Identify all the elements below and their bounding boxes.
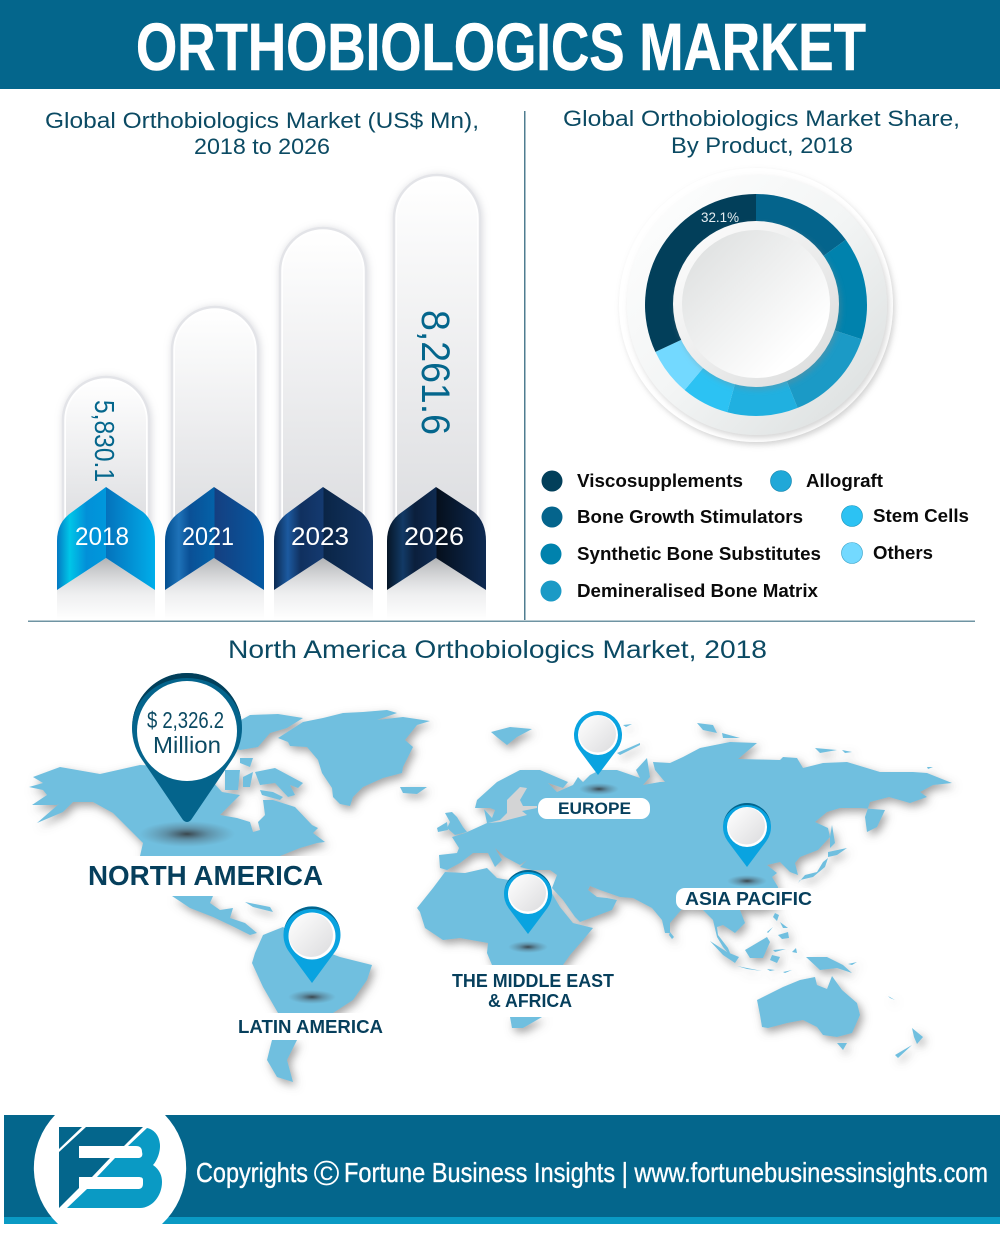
world map [29, 710, 952, 1082]
label: middle east and africa: & AFRICA [488, 991, 572, 1011]
legend: Viscosupplements [577, 471, 743, 491]
ribbon reflections [57, 558, 486, 620]
segment: demineralised bone matrix [756, 305, 862, 408]
bar 2018 [63, 377, 149, 530]
bar 2021 [172, 307, 258, 530]
label: middle east and africa: THE MIDDLE EAST [452, 971, 614, 991]
heading: north america: North America Orthobiologics Market, 2018 [228, 636, 767, 664]
segment: synthetic bone substitutes [756, 240, 867, 339]
ribbon 2023: 2023 [291, 523, 349, 551]
heading: market size: Global Orthobiologics Market (US$ Mn), [45, 108, 479, 133]
caribbean [245, 902, 273, 912]
value 2026: 8,261.6 [413, 310, 457, 435]
segment: viscosupplements [645, 194, 756, 352]
bar 2023 [280, 228, 366, 530]
share label: 32.1% [701, 209, 739, 225]
value 2018: 5,830.1 [89, 400, 120, 482]
legend: Bone Growth Stimulators [577, 507, 803, 527]
ribbon 2021 [165, 487, 264, 590]
africa [417, 868, 593, 965]
heading: market size [45, 108, 479, 159]
ribbon 2021: 2021 [182, 523, 234, 551]
japan and sakhalin [798, 825, 847, 883]
label: latin america: LATIN AMERICA [238, 1017, 383, 1037]
segment: stem cells [685, 305, 756, 412]
footer band [4, 1115, 1000, 1224]
asia pacific label band [676, 888, 816, 910]
pin: middle east and africa [504, 870, 552, 953]
latin america label band [232, 1013, 387, 1040]
tasmania [837, 1043, 847, 1050]
ribbon 2026 [387, 487, 486, 590]
south america tip [267, 1040, 297, 1082]
bar 2026 [394, 175, 480, 530]
pin: north america: Million [153, 732, 221, 758]
title banner [0, 0, 1000, 89]
ribbon 2026: 2026 [404, 523, 464, 551]
legend: Others [873, 543, 933, 563]
pin: asia pacific [723, 803, 771, 887]
ribbon 2018 [57, 487, 155, 590]
eurasia [439, 742, 952, 958]
ribbon 2018: 2018 [75, 523, 129, 551]
segment: bone growth stimulators [756, 194, 846, 305]
pin: north america: $ 2,326.2 [147, 707, 224, 733]
label: north america: NORTH AMERICA [88, 860, 323, 891]
northern islands [491, 723, 933, 769]
label: middle east and africa [452, 971, 614, 1011]
donut chart [619, 168, 893, 442]
copyright text: Copyrights [196, 1157, 308, 1188]
baltic sea [488, 787, 537, 823]
segment: allograft [727, 305, 798, 416]
heading: market share: Global Orthobiologics Market Share, [563, 106, 960, 131]
bar chart [57, 175, 486, 620]
legend: Stem Cells [873, 506, 969, 526]
south america [252, 927, 372, 1013]
legend: Allograft [806, 471, 883, 491]
new zealand [895, 1028, 923, 1058]
pin: north america [132, 673, 242, 847]
label: europe: EUROPE [558, 799, 631, 818]
copyright text: C [320, 1164, 333, 1185]
label: asia pacific: ASIA PACIFIC [685, 889, 812, 909]
iceland [400, 787, 427, 794]
heading: market size: 2018 to 2026 [194, 134, 330, 159]
north america label band [85, 856, 335, 896]
southeast asia islands [669, 913, 895, 1000]
greenland [278, 710, 430, 806]
australia [757, 976, 860, 1037]
segment: others [655, 305, 756, 390]
north america mainland [29, 765, 325, 856]
pin: europe [574, 711, 622, 795]
heading: market share: By Product, 2018 [671, 133, 853, 158]
europe label band [538, 798, 650, 819]
pin: latin america [284, 906, 340, 1004]
legend: Demineralised Bone Matrix [577, 581, 818, 601]
southern africa [510, 1017, 542, 1028]
ribbon 2023 [274, 487, 373, 590]
legend [540, 470, 969, 602]
arctic islands [225, 714, 303, 800]
logo badge [34, 1115, 186, 1224]
legend: Synthetic Bone Substitutes [577, 544, 821, 564]
heading: market share [563, 106, 960, 158]
middle east label band [440, 965, 625, 1017]
british isles [437, 812, 467, 835]
central america [172, 896, 257, 935]
